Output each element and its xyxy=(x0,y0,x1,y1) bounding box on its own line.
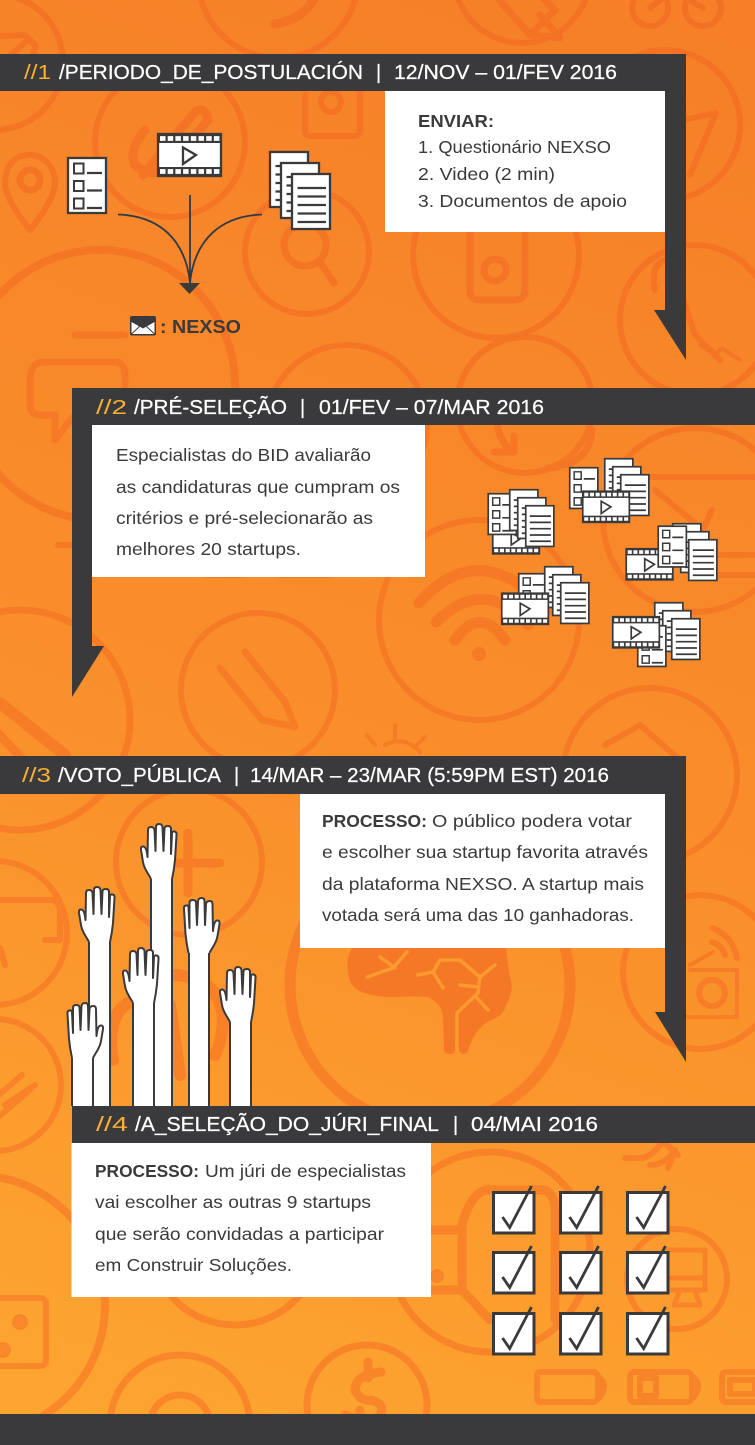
step 1 divider: | xyxy=(376,62,381,84)
panel: step 3 process xyxy=(300,794,665,948)
icon: video xyxy=(158,134,221,176)
step 3 heading: /VOTO_PÚBLICA xyxy=(58,764,222,787)
description line 3: critérios e pré-selecionarão as xyxy=(116,508,373,528)
icon: questionnaire xyxy=(68,158,106,213)
illustration: raised hands xyxy=(67,824,256,1106)
step 3 divider: | xyxy=(234,765,239,787)
hand 1 xyxy=(141,824,177,1106)
description line 1: Especialistas do BID avaliarão xyxy=(116,445,371,465)
description line 4: melhores 20 startups. xyxy=(116,539,301,559)
icon: envelope xyxy=(130,316,156,336)
send item 3: 3. Documentos de apoio xyxy=(418,191,627,211)
step 1 number: //1 xyxy=(24,62,51,84)
icon grid: nine checked boxes xyxy=(494,1186,668,1354)
step 2 banner and arrow xyxy=(72,388,755,697)
hand 6 xyxy=(67,1003,103,1106)
description line 2: as candidaturas que cumpram os xyxy=(116,477,400,497)
jury line 4: em Construir Soluções. xyxy=(95,1255,292,1275)
step 4 heading: /A_SELEÇÃO_DO_JÚRI_FINAL xyxy=(135,1112,439,1136)
step 4 divider: | xyxy=(453,1114,458,1136)
jury line 3: que serão convidadas a participar xyxy=(95,1224,384,1244)
jury line 2: vai escolher as outras 9 startups xyxy=(95,1192,371,1212)
process line 4: votada será uma das 10 ganhadoras. xyxy=(322,905,634,925)
step 1 dates: 12/NOV – 01/FEV 2016 xyxy=(394,62,617,84)
step 3 banner and arrow xyxy=(0,756,686,1062)
NEXSO label: : NEXSO xyxy=(160,317,241,337)
process line 3: da plataforma NEXSO. A startup mais xyxy=(322,874,644,894)
arrow: merging submissions xyxy=(118,195,262,294)
panel: step 2 description xyxy=(92,425,425,577)
process line 1: O público podera votar xyxy=(432,811,632,831)
step 3 number: //3 xyxy=(22,765,51,787)
hand 4 xyxy=(184,898,220,1106)
step 2 heading: /PRÉ-SELEÇÃO xyxy=(134,395,287,419)
process label: PROCESSO: xyxy=(322,811,427,831)
hand 5 xyxy=(220,967,256,1106)
step 2 divider: | xyxy=(300,397,305,419)
panel: step 4 process xyxy=(72,1143,431,1297)
send heading: ENVIAR: xyxy=(418,111,494,131)
footer bar xyxy=(0,1414,755,1445)
jury label: PROCESSO: xyxy=(95,1161,199,1181)
step 3 dates: 14/MAR – 23/MAR (5:59PM EST) 2016 xyxy=(250,765,609,787)
step 2 dates: 01/FEV – 07/MAR 2016 xyxy=(319,397,544,419)
jury line 1: Um júri de especialistas xyxy=(205,1161,406,1181)
icon cluster: application B xyxy=(570,459,649,522)
process line 2: e escolher sua startup favorita através xyxy=(322,842,648,862)
step 2 number: //2 xyxy=(96,397,127,419)
decorative brain xyxy=(347,948,512,1054)
hand 2 xyxy=(79,887,115,1106)
icon cluster: application A xyxy=(488,490,554,554)
icon cluster: application C xyxy=(626,524,717,580)
hand 3 xyxy=(123,948,159,1106)
send item 2: 2. Video (2 min) xyxy=(418,164,555,184)
icon cluster: application D xyxy=(502,567,589,624)
icon cluster: application E xyxy=(613,603,700,666)
step 4 number: //4 xyxy=(96,1114,128,1136)
icon: documents xyxy=(270,152,330,229)
step 4 banner xyxy=(72,1106,755,1143)
send item 1: 1. Questionário NEXSO xyxy=(418,137,611,157)
step 4 date: 04/MAI 2016 xyxy=(471,1114,598,1136)
panel: step 1 send list xyxy=(385,91,665,232)
step 1 heading: /PERIODO_DE_POSTULACIÓN xyxy=(59,61,363,84)
step 1 banner and arrow xyxy=(0,54,686,360)
